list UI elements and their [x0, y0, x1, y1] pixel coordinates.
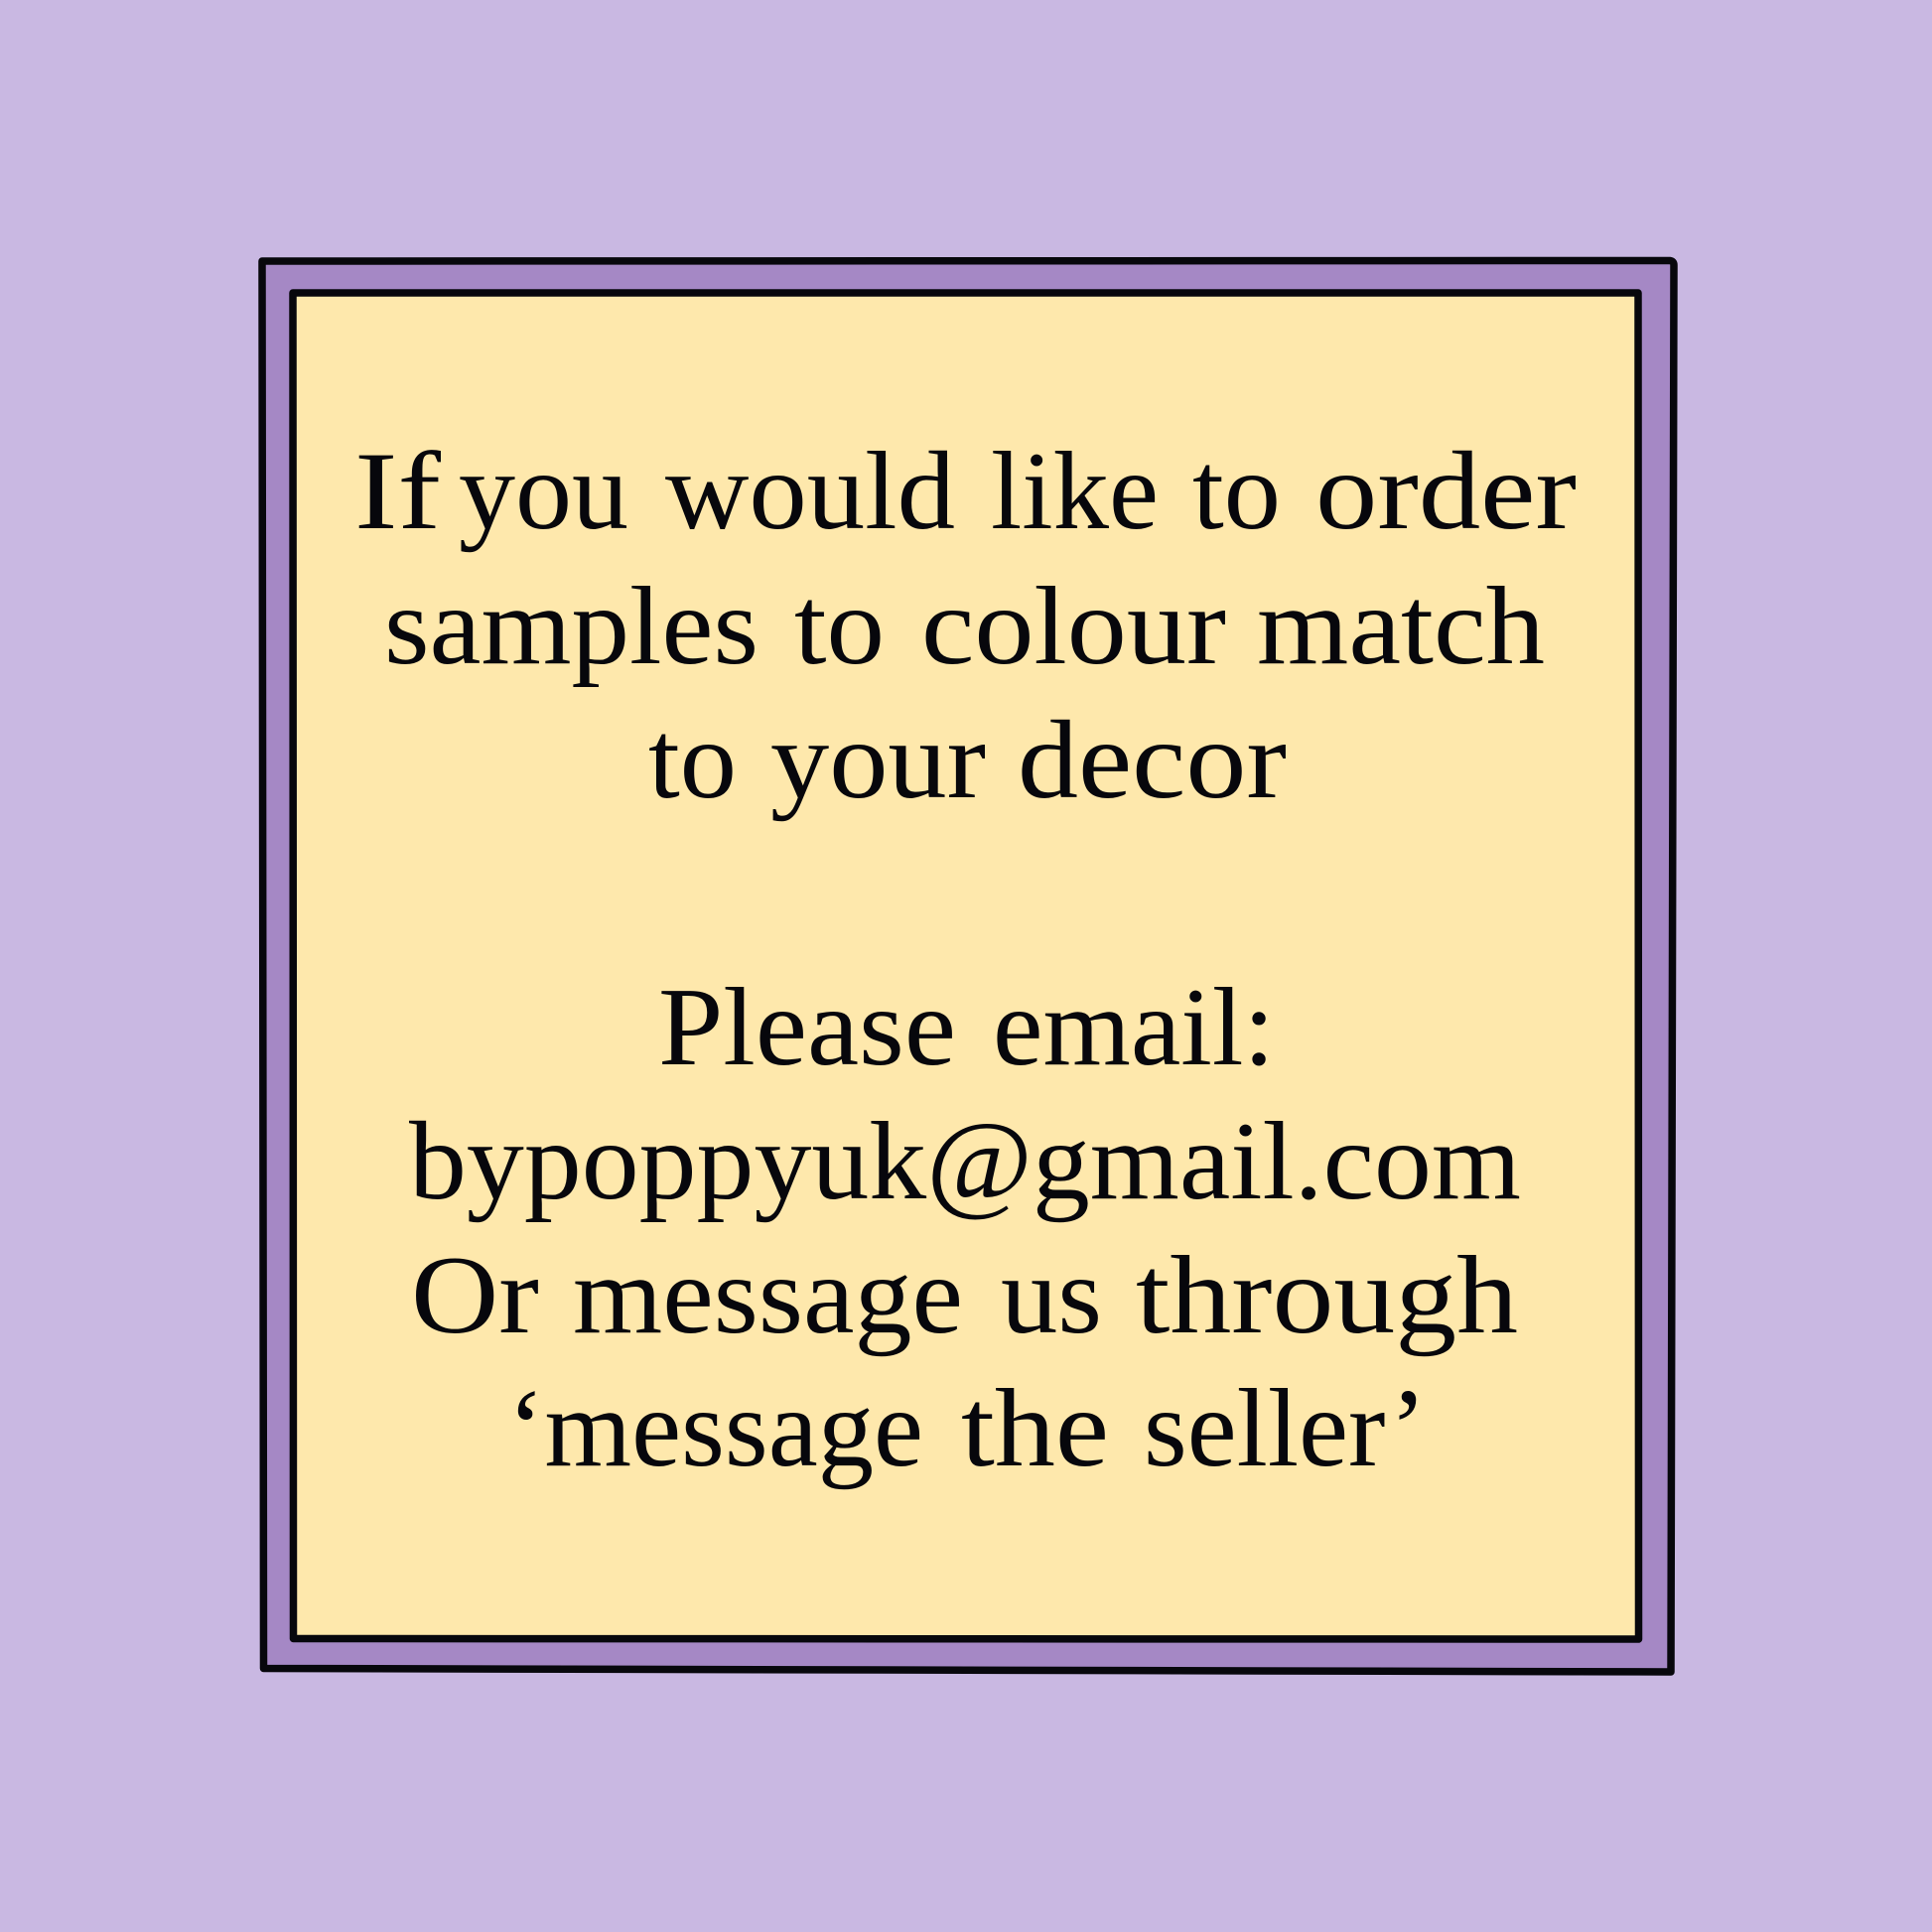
text block: sample request — [354, 430, 1577, 822]
text block: contact details: bypoppyuk@gmail.com — [409, 1100, 1521, 1223]
inner note panel — [293, 293, 1638, 1639]
text block: contact details: us — [1001, 1234, 1102, 1357]
text block: contact details: message — [573, 1234, 963, 1357]
text block: sample request: match — [1257, 565, 1545, 688]
text block: sample request: to — [794, 565, 885, 688]
text block: contact details: ‘message — [507, 1367, 923, 1490]
text block: sample request: to — [648, 699, 737, 822]
text block: contact details — [409, 966, 1521, 1490]
text block: sample request: to — [1192, 430, 1281, 553]
text block: contact details: Or — [411, 1234, 539, 1357]
text block: contact details: Please — [658, 966, 956, 1089]
outer frame — [262, 260, 1674, 1672]
text block: contact details: seller’ — [1144, 1367, 1427, 1490]
text block: contact details: through — [1136, 1234, 1518, 1357]
text block: sample request: If — [354, 430, 442, 553]
text block: contact details: the — [961, 1367, 1109, 1490]
text block: sample request: like — [991, 430, 1159, 553]
text block: sample request: order — [1315, 430, 1577, 553]
text block: sample request: samples — [384, 565, 759, 688]
text block: sample request: decor — [1018, 699, 1287, 822]
text block: contact details: email: — [993, 966, 1275, 1089]
text block: sample request: you — [459, 430, 628, 553]
text block: sample request: your — [770, 699, 986, 822]
text block: sample request: would — [665, 430, 955, 553]
text block: sample request: colour — [921, 565, 1226, 688]
